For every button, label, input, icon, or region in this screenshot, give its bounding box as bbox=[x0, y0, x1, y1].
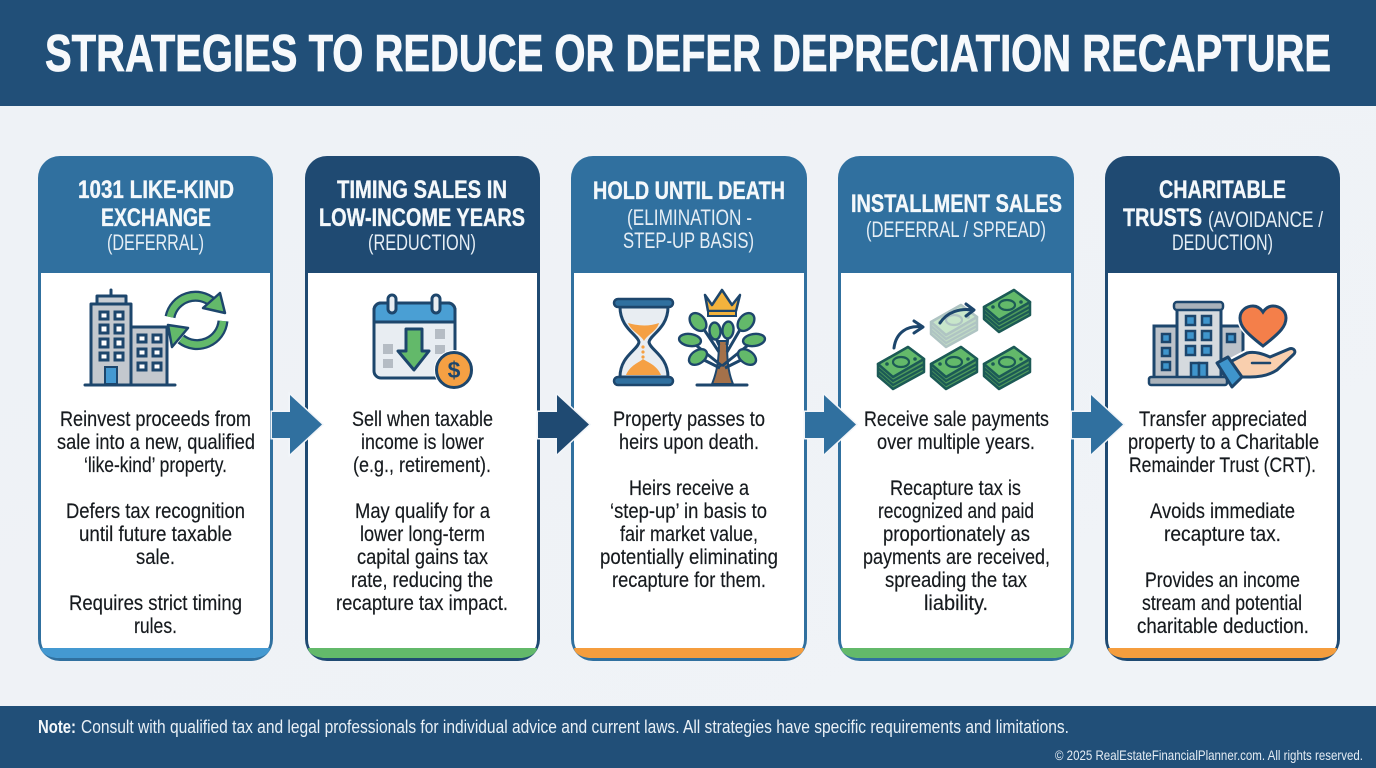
body text: Transfer appreciated bbox=[1139, 408, 1307, 431]
body text: payments are received, bbox=[863, 546, 1050, 569]
body text bbox=[336, 408, 508, 615]
icon: building with heart in hand bbox=[1149, 302, 1295, 387]
heading: (DEFERRAL) bbox=[107, 230, 204, 255]
body text: heirs upon death. bbox=[619, 431, 759, 454]
body text bbox=[600, 408, 778, 592]
body text bbox=[57, 408, 255, 638]
body text: liability. bbox=[924, 592, 988, 615]
body text: Remainder Trust (CRT). bbox=[1129, 454, 1316, 477]
body text: Defers tax recognition bbox=[66, 500, 245, 523]
body text: Recapture tax is bbox=[890, 477, 1021, 500]
body text: fair market value, bbox=[620, 523, 758, 546]
body text: (e.g., retirement). bbox=[353, 454, 491, 477]
heading bbox=[1123, 176, 1324, 255]
body text: sale. bbox=[136, 546, 175, 569]
body text: recapture tax. bbox=[1164, 523, 1281, 546]
body text: Provides an income bbox=[1145, 569, 1300, 592]
body text: ‘step-up’ in basis to bbox=[610, 500, 767, 523]
body text: income is lower bbox=[361, 431, 484, 454]
heading bbox=[319, 176, 525, 255]
body text: spreading the tax bbox=[885, 569, 1027, 592]
body text bbox=[1128, 408, 1319, 638]
accent strip: green bbox=[841, 648, 1071, 658]
heading: TRUSTS bbox=[1123, 204, 1202, 232]
body text: Property passes to bbox=[613, 408, 765, 431]
icon: calendar with down arrow and dollar coin bbox=[374, 295, 474, 390]
accent strip: orange bbox=[1108, 648, 1337, 658]
body text: recognized and paid bbox=[878, 500, 1034, 523]
note: Consult with qualified tax and legal professionals for individual advice and current laws. All strategies have specific requirements and limitations. bbox=[81, 717, 1069, 737]
body text: Sell when taxable bbox=[352, 408, 493, 431]
body text: Heirs receive a bbox=[629, 477, 749, 500]
accent strip: green bbox=[308, 648, 537, 658]
heading: CHARITABLE bbox=[1159, 176, 1286, 204]
body text: recapture tax impact. bbox=[336, 592, 508, 615]
body text: over multiple years. bbox=[877, 431, 1035, 454]
title banner bbox=[0, 0, 1376, 106]
icon: calendar with down arrow and dollar coin: $ bbox=[448, 357, 461, 383]
body text: Receive sale payments bbox=[864, 408, 1049, 431]
arrow: step 4 to 5 bbox=[1072, 395, 1123, 454]
arrow: step 1 to 2 bbox=[272, 395, 322, 454]
panel: charitable trusts bbox=[1105, 156, 1340, 661]
body text: sale into a new, qualified bbox=[57, 431, 255, 454]
accent strip: orange bbox=[574, 648, 804, 658]
body text: rules. bbox=[134, 615, 177, 638]
body text: Avoids immediate bbox=[1150, 500, 1295, 523]
body text bbox=[863, 408, 1050, 615]
heading bbox=[851, 190, 1062, 242]
body text: Requires strict timing bbox=[69, 592, 242, 615]
body text: property to a Charitable bbox=[1128, 431, 1319, 454]
panel: timing sales in low-income years bbox=[305, 156, 540, 661]
heading: STEP-UP BASIS) bbox=[623, 228, 754, 253]
heading: LOW-INCOME YEARS bbox=[319, 204, 525, 232]
panel: hold until death bbox=[571, 156, 807, 661]
icon: hourglass bbox=[614, 299, 673, 385]
heading: INSTALLMENT SALES bbox=[851, 190, 1062, 218]
body text: lower long-term bbox=[360, 523, 485, 546]
heading: (REDUCTION) bbox=[368, 230, 476, 255]
icon: stacks of money with arrows bbox=[878, 290, 1030, 389]
heading: HOLD UNTIL DEATH bbox=[593, 177, 785, 205]
heading: 1031 LIKE-KIND bbox=[78, 176, 234, 204]
heading: EXCHANGE bbox=[101, 204, 211, 232]
arrow: step 3 to 4 bbox=[805, 395, 856, 454]
footer band bbox=[0, 706, 1376, 768]
heading: TIMING SALES IN bbox=[337, 176, 507, 204]
body text: ‘like-kind’ property. bbox=[84, 454, 227, 477]
panel: 1031 like-kind exchange bbox=[38, 156, 273, 661]
body text: potentially eliminating bbox=[600, 546, 778, 569]
heading: (ELIMINATION - bbox=[627, 205, 752, 230]
heading: DEDUCTION) bbox=[1172, 230, 1273, 255]
body text: Reinvest proceeds from bbox=[60, 408, 251, 431]
body text: stream and potential bbox=[1142, 592, 1302, 615]
body text: May qualify for a bbox=[355, 500, 490, 523]
heading: (DEFERRAL / SPREAD) bbox=[866, 217, 1046, 242]
body text: proportionately as bbox=[883, 523, 1030, 546]
icon: tree with crown bbox=[678, 290, 766, 385]
icon: buildings with exchange arrows bbox=[85, 290, 225, 385]
accent strip: blue bbox=[41, 648, 270, 658]
body text: until future taxable bbox=[79, 523, 232, 546]
heading bbox=[78, 176, 234, 255]
body text: recapture for them. bbox=[612, 569, 766, 592]
heading: (AVOIDANCE / bbox=[1208, 207, 1324, 232]
body text: charitable deduction. bbox=[1137, 615, 1309, 638]
panel: installment sales bbox=[838, 156, 1074, 661]
body text: rate, reducing the bbox=[351, 569, 493, 592]
arrow: step 2 to 3 bbox=[538, 395, 589, 454]
body text: capital gains tax bbox=[357, 546, 488, 569]
note: Note: bbox=[38, 717, 76, 737]
heading bbox=[593, 177, 785, 253]
